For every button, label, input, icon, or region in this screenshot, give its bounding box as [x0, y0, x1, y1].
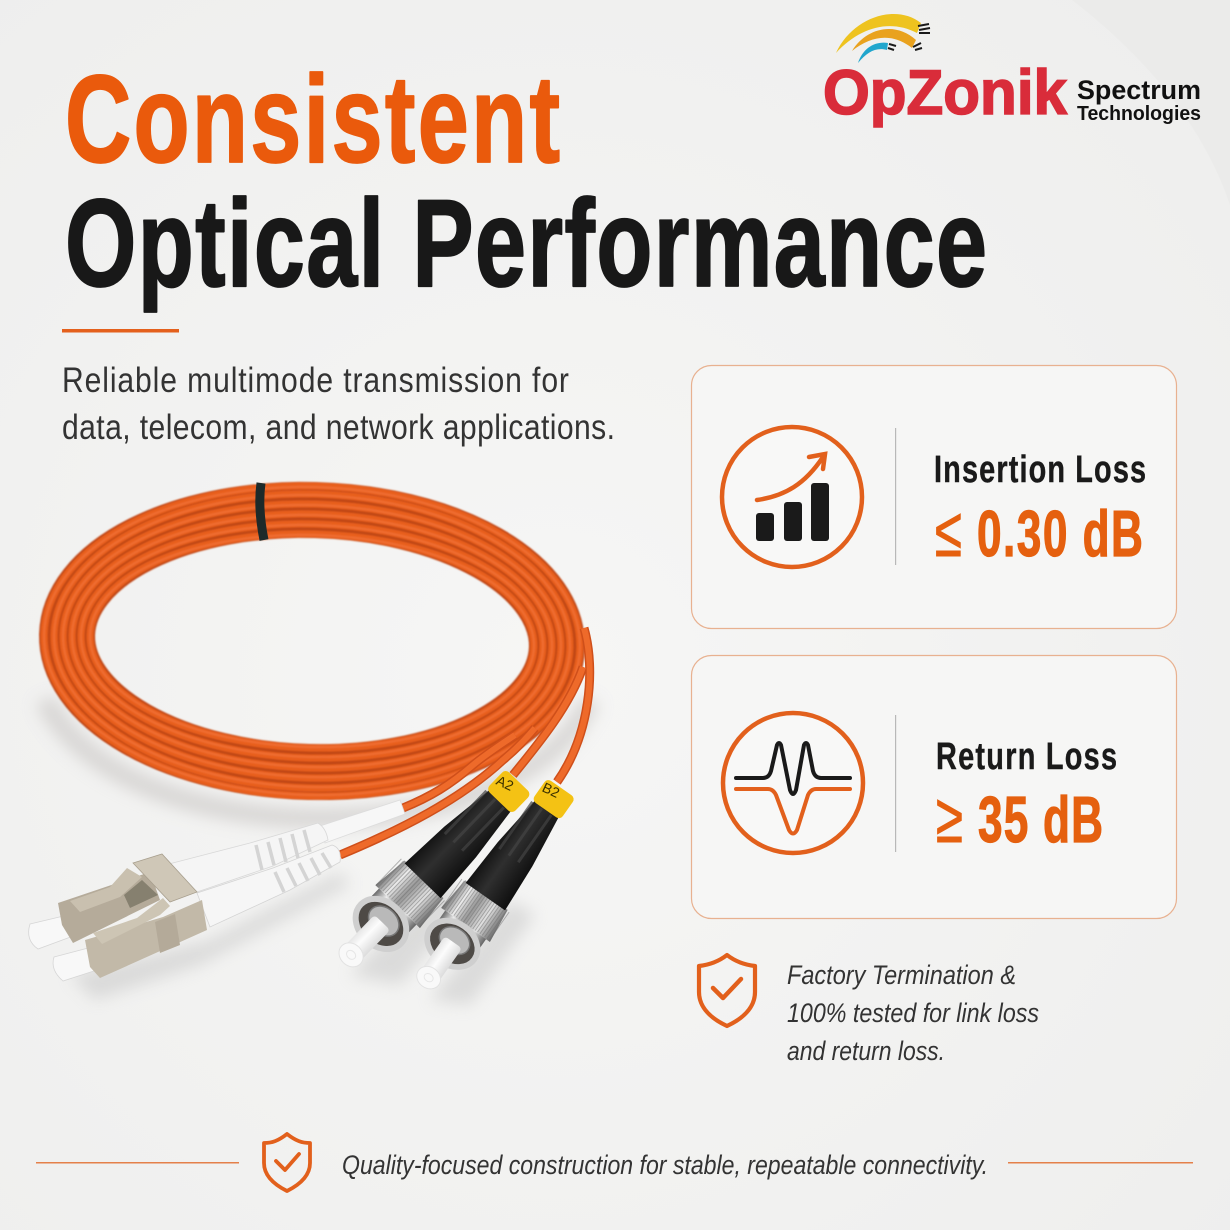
- LC duplex connector: [29, 800, 405, 981]
- panel: return loss: [692, 656, 1176, 918]
- return loss label: Return Loss: [936, 735, 1117, 778]
- upper ferrule: [29, 914, 76, 949]
- ST connector A2: [321, 760, 541, 984]
- label A2: A2: [494, 772, 516, 794]
- duplex clip: [133, 854, 197, 902]
- subtitle: [62, 360, 615, 447]
- title: [65, 51, 987, 313]
- panel: insertion loss: [692, 366, 1176, 628]
- fiber patch cable photo: [29, 479, 590, 1005]
- icon: rising bar chart: [722, 427, 862, 567]
- logo: descriptor: Spectrum: [1077, 75, 1201, 105]
- upper boot: [165, 823, 328, 892]
- coil tie: [260, 483, 264, 540]
- title: Optical Performance: [65, 175, 987, 313]
- connector shadows: [70, 872, 535, 1005]
- icon: factory test shield: [699, 955, 755, 1026]
- insertion loss value: ≤: [935, 493, 962, 571]
- upper boot tail: [320, 800, 405, 843]
- lower plug housing: [85, 900, 207, 978]
- return loss value: [936, 779, 1103, 857]
- title accent rule: [62, 329, 179, 332]
- logo: wordmark: OpZonik: [823, 58, 1068, 128]
- logo: descriptor: Technologies: [1077, 103, 1201, 125]
- return loss value: 35 dB: [978, 784, 1103, 856]
- icon: reflection waveform: [723, 713, 863, 853]
- factory termination note: [787, 960, 1039, 1066]
- factory termination note: and return loss.: [787, 1036, 945, 1066]
- lower ferrule: [53, 947, 97, 981]
- upper plug housing: [58, 872, 160, 943]
- insertion loss value: 0.30 dB: [977, 498, 1143, 570]
- factory termination note: 100% tested for link loss: [787, 998, 1039, 1028]
- insertion loss label: Insertion Loss: [934, 448, 1146, 491]
- logo: [823, 14, 1201, 128]
- return loss value: ≥: [936, 779, 963, 857]
- subtitle: Reliable multimode transmission for: [62, 360, 569, 400]
- lower boot: [197, 845, 340, 927]
- ST connector B2: [398, 771, 586, 1003]
- subtitle: data, telecom, and network applications.: [62, 407, 615, 447]
- footer statement: Quality-focused construction for stable, repeatable connectivity.: [342, 1150, 988, 1180]
- label B2: B2: [540, 779, 562, 801]
- footer: [36, 1134, 1193, 1191]
- factory termination note: Factory Termination &: [787, 960, 1016, 990]
- orange cable coil: [40, 479, 584, 803]
- loose cable tails: [340, 628, 590, 855]
- title: Consistent: [65, 51, 560, 189]
- icon: quality shield: [264, 1134, 310, 1191]
- coil shadow: [45, 700, 590, 818]
- logo: descriptor: [1077, 75, 1201, 125]
- logo: fiber arcs icon: [836, 14, 930, 63]
